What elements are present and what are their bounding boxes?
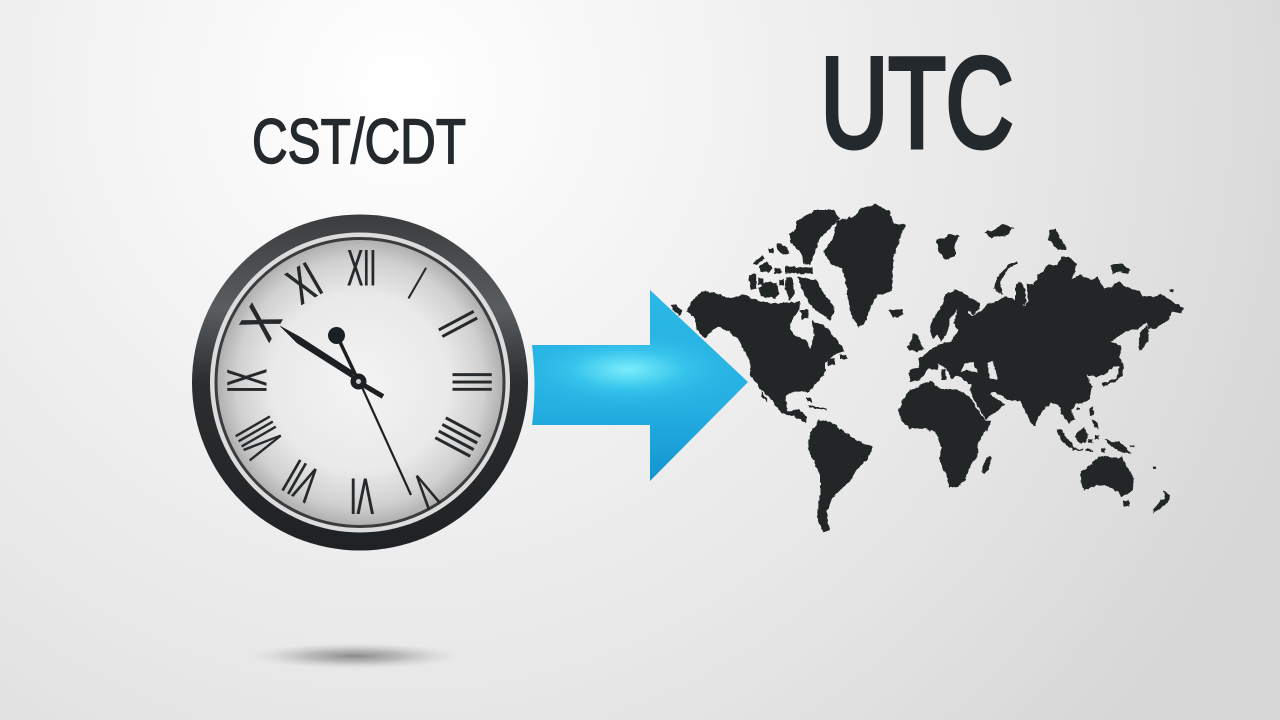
- clock numerals: XI: [278, 252, 331, 315]
- Eurasia: [909, 257, 1183, 427]
- Arctic islands: [669, 210, 903, 410]
- clock numerals: VI: [350, 468, 374, 524]
- clock bezel: [192, 214, 528, 550]
- islands: [907, 223, 1175, 513]
- clock numerals: V: [405, 463, 446, 519]
- arrow: CST/CDT to UTC: [532, 290, 748, 481]
- clock: [192, 214, 528, 550]
- clock hands: [280, 326, 411, 495]
- clock numerals: III: [441, 371, 504, 393]
- heading: UTC: UTC: [820, 32, 1014, 175]
- clock numerals: [215, 240, 504, 524]
- heading: CST/CDT: CST/CDT: [252, 107, 466, 177]
- clock numerals: X: [230, 296, 292, 349]
- clock numerals: XII: [347, 240, 376, 296]
- clock shadow: [250, 643, 460, 669]
- map: Eurasia, Africa and Oceania: [898, 223, 1183, 513]
- Africa: [898, 381, 992, 488]
- clock silver ring: [210, 232, 510, 532]
- clock face: [216, 238, 504, 526]
- Australia: [1081, 456, 1135, 497]
- clock numerals: IX: [215, 369, 278, 393]
- North America: [687, 291, 845, 422]
- clock numerals: II: [427, 302, 490, 345]
- clock numerals: VII: [275, 449, 328, 512]
- Greenland: [823, 204, 906, 328]
- clock numerals: VIII: [224, 408, 294, 467]
- clock numerals: I: [401, 258, 433, 309]
- map: Americas and Greenland: [669, 204, 906, 532]
- clock numerals: IIII: [423, 409, 493, 465]
- world map: [669, 204, 1183, 532]
- South America: [808, 420, 873, 532]
